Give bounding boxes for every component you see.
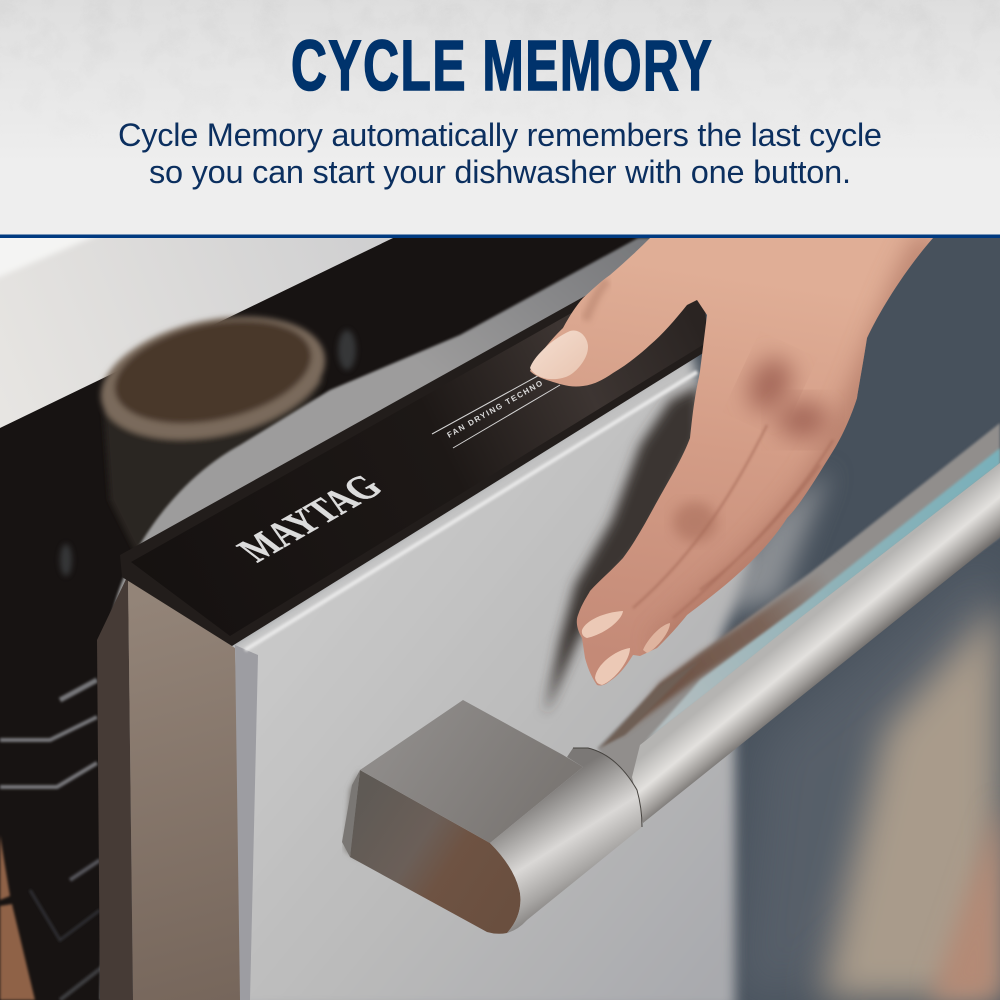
glints in the interior: [60, 330, 356, 576]
blue divider: [0, 234, 1000, 238]
mount end face: [350, 770, 520, 934]
subtitle: [118, 117, 882, 190]
door top edge highlight: [245, 372, 697, 650]
mount collar: [490, 748, 642, 933]
door shadow beside the hand: [545, 385, 700, 715]
finger nail three: [643, 623, 670, 653]
bright corner of the countertop: [0, 230, 110, 285]
photo: dishwasher scene: [0, 230, 1000, 1000]
curved door liner edge: [100, 238, 680, 1000]
finger nail one: [582, 611, 623, 638]
finger nail two: [595, 648, 630, 685]
cup inner: [105, 304, 321, 440]
handle mount: [342, 700, 642, 934]
handle upper silhouette strip: [597, 423, 1000, 800]
background: lighter blue-grey at lower right: [730, 540, 1000, 1000]
door-to-background transition: [690, 470, 830, 620]
title: CYCLE MEMORY: [291, 26, 712, 105]
control panel rim: [120, 232, 708, 646]
finger creases: [633, 425, 833, 618]
cup in the dishwasher: [89, 298, 337, 560]
door side: [128, 578, 245, 1000]
background: pink tint in bottom right corner: [930, 800, 1000, 1000]
mount left sliver: [342, 770, 360, 857]
handle bar: [632, 463, 1000, 823]
subtitle: Cycle Memory automatically remembers the last cycle: [118, 117, 882, 153]
panel label: FAN DRYING TECHNO: [446, 379, 544, 440]
knuckle marks: [740, 351, 800, 419]
darker outer edge of the hand: [660, 238, 930, 650]
control panel glass: [131, 238, 706, 636]
background: tan blurred shape at lower right: [820, 600, 1000, 1000]
header background: [0, 0, 1000, 235]
dark reflection near the collar: [600, 660, 700, 748]
hand shading and creases: [585, 238, 930, 650]
dishwasher interior: [0, 236, 660, 1000]
teal reflection on handle: [645, 448, 1000, 742]
collar seam: [573, 748, 642, 827]
shadow left of mount: [345, 770, 360, 860]
cup rim: [89, 298, 337, 458]
brand name: MAYTAG: [227, 467, 392, 569]
mount top face: [360, 700, 583, 843]
hand: [530, 238, 933, 686]
panel label: [432, 372, 560, 448]
countertop band: [0, 238, 393, 428]
stainless door front: [200, 350, 750, 1000]
hand silhouette: [530, 238, 933, 686]
dish rack: [0, 680, 105, 1000]
wood trim at lower left: [0, 835, 35, 1000]
thumb nail: [530, 330, 588, 379]
door side highlight strip: [235, 645, 258, 1000]
header band: [0, 0, 1000, 238]
cup body: [103, 380, 325, 560]
thumb crease shadow: [585, 280, 607, 320]
header paper texture: [0, 0, 1000, 150]
background: blurred kitchen behind the door: [0, 238, 1000, 1000]
brown reflection on handle: [620, 565, 850, 735]
door side inner strip: [97, 575, 133, 1000]
subtitle: so you can start your dishwasher with one button.: [149, 154, 851, 190]
